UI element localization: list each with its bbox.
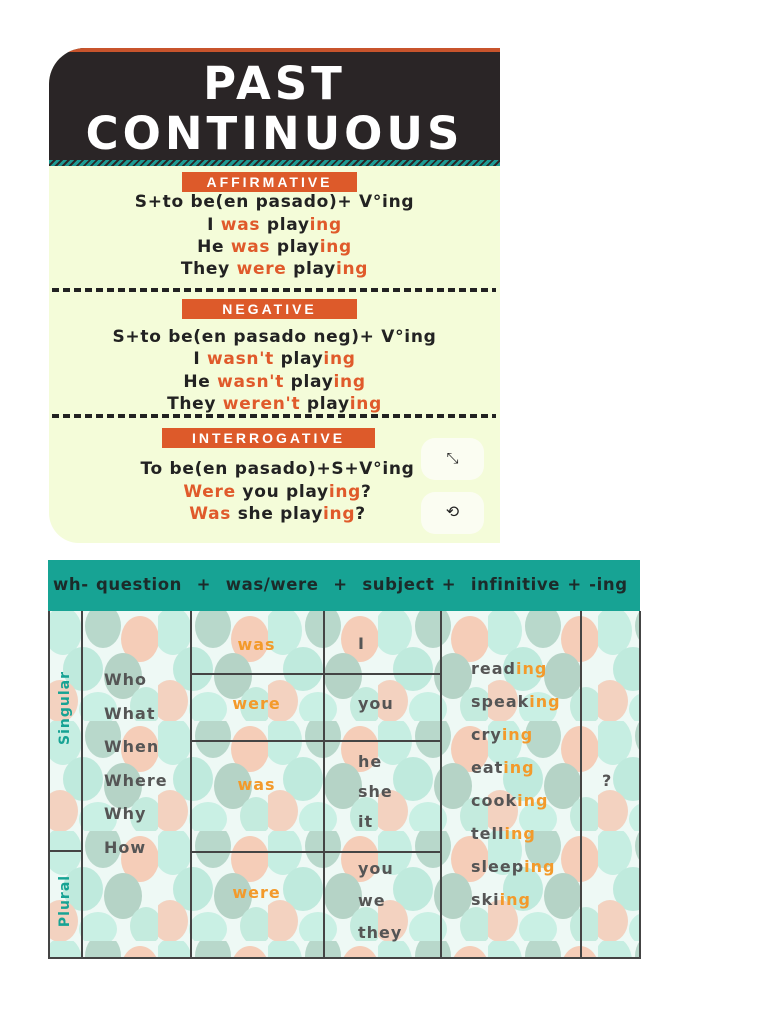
text: negative rules	[112, 327, 437, 414]
text: interrogative rules	[140, 459, 415, 524]
wh words: Who	[104, 670, 147, 689]
label: negative: NEGATIVE	[222, 301, 317, 317]
wh words: How	[104, 838, 146, 856]
icon: search button	[421, 492, 484, 534]
text: Were you playing?	[183, 482, 372, 502]
icon: expand button: ⤡	[446, 450, 458, 467]
question mark: ?	[602, 771, 612, 790]
subject column: they	[358, 923, 402, 942]
wh words: Why	[104, 804, 146, 823]
subject column: it	[358, 812, 373, 831]
label: interrogative	[162, 428, 375, 448]
was/were column: were	[232, 883, 281, 902]
was/were column: was	[237, 635, 276, 654]
text: Was she playing?	[189, 504, 366, 524]
subject column: you	[358, 859, 394, 878]
verbs column	[471, 659, 561, 909]
header row	[48, 560, 640, 611]
header row: wh- question + was/were + subject + infinitive + -ing	[53, 575, 628, 594]
panel: past continuous card	[49, 48, 500, 543]
was/were column: was	[237, 775, 276, 794]
was/were column	[232, 635, 281, 902]
text: S+to be(en pasado neg)+ V°ing	[112, 327, 437, 347]
verbs column: sleeping	[471, 857, 556, 876]
text: He was playing	[197, 237, 352, 257]
was/were column: were	[232, 694, 281, 713]
panel: wh-question table	[48, 560, 641, 959]
verbs column: skiing	[471, 890, 531, 909]
label: interrogative: INTERROGATIVE	[192, 430, 345, 446]
text: S+to be(en pasado)+ V°ing	[135, 192, 414, 212]
grid lines	[48, 611, 50, 959]
verbs column: crying	[471, 725, 533, 744]
verbs column: reading	[471, 659, 547, 678]
text: I was playing	[207, 215, 342, 235]
subject column: she	[358, 782, 393, 801]
subject column: he	[358, 752, 382, 771]
background pattern	[50, 611, 639, 957]
icon: search button: ⟲	[446, 504, 459, 521]
subject column: you	[358, 694, 394, 713]
verbs column: speaking	[471, 692, 561, 711]
title: PAST	[203, 57, 346, 110]
label: affirmative: AFFIRMATIVE	[206, 174, 333, 190]
text: They weren't playing	[167, 394, 382, 414]
text: To be(en pasado)+S+V°ing	[140, 459, 415, 479]
label: plural: Plural	[57, 875, 73, 927]
wh words: What	[104, 704, 155, 722]
verbs column: eating	[471, 758, 535, 777]
wh words	[104, 670, 168, 856]
text: affirmative rules	[135, 192, 414, 279]
label: negative	[182, 299, 357, 319]
verbs column: telling	[471, 824, 536, 843]
title	[86, 57, 463, 160]
wh words: Where	[104, 770, 168, 790]
label: affirmative	[182, 172, 357, 192]
subject column: we	[358, 891, 386, 910]
wh words: When	[104, 737, 159, 756]
label: singular: Singular	[57, 671, 73, 745]
text: They were playing	[181, 259, 368, 279]
icon: expand button	[421, 438, 484, 480]
title: CONTINUOUS	[86, 107, 463, 160]
subject column	[358, 634, 402, 942]
text: I wasn't playing	[193, 349, 356, 369]
text: He wasn't playing	[183, 372, 366, 392]
header band	[49, 48, 500, 160]
subject column: I	[358, 634, 365, 653]
verbs column: cooking	[471, 791, 548, 810]
